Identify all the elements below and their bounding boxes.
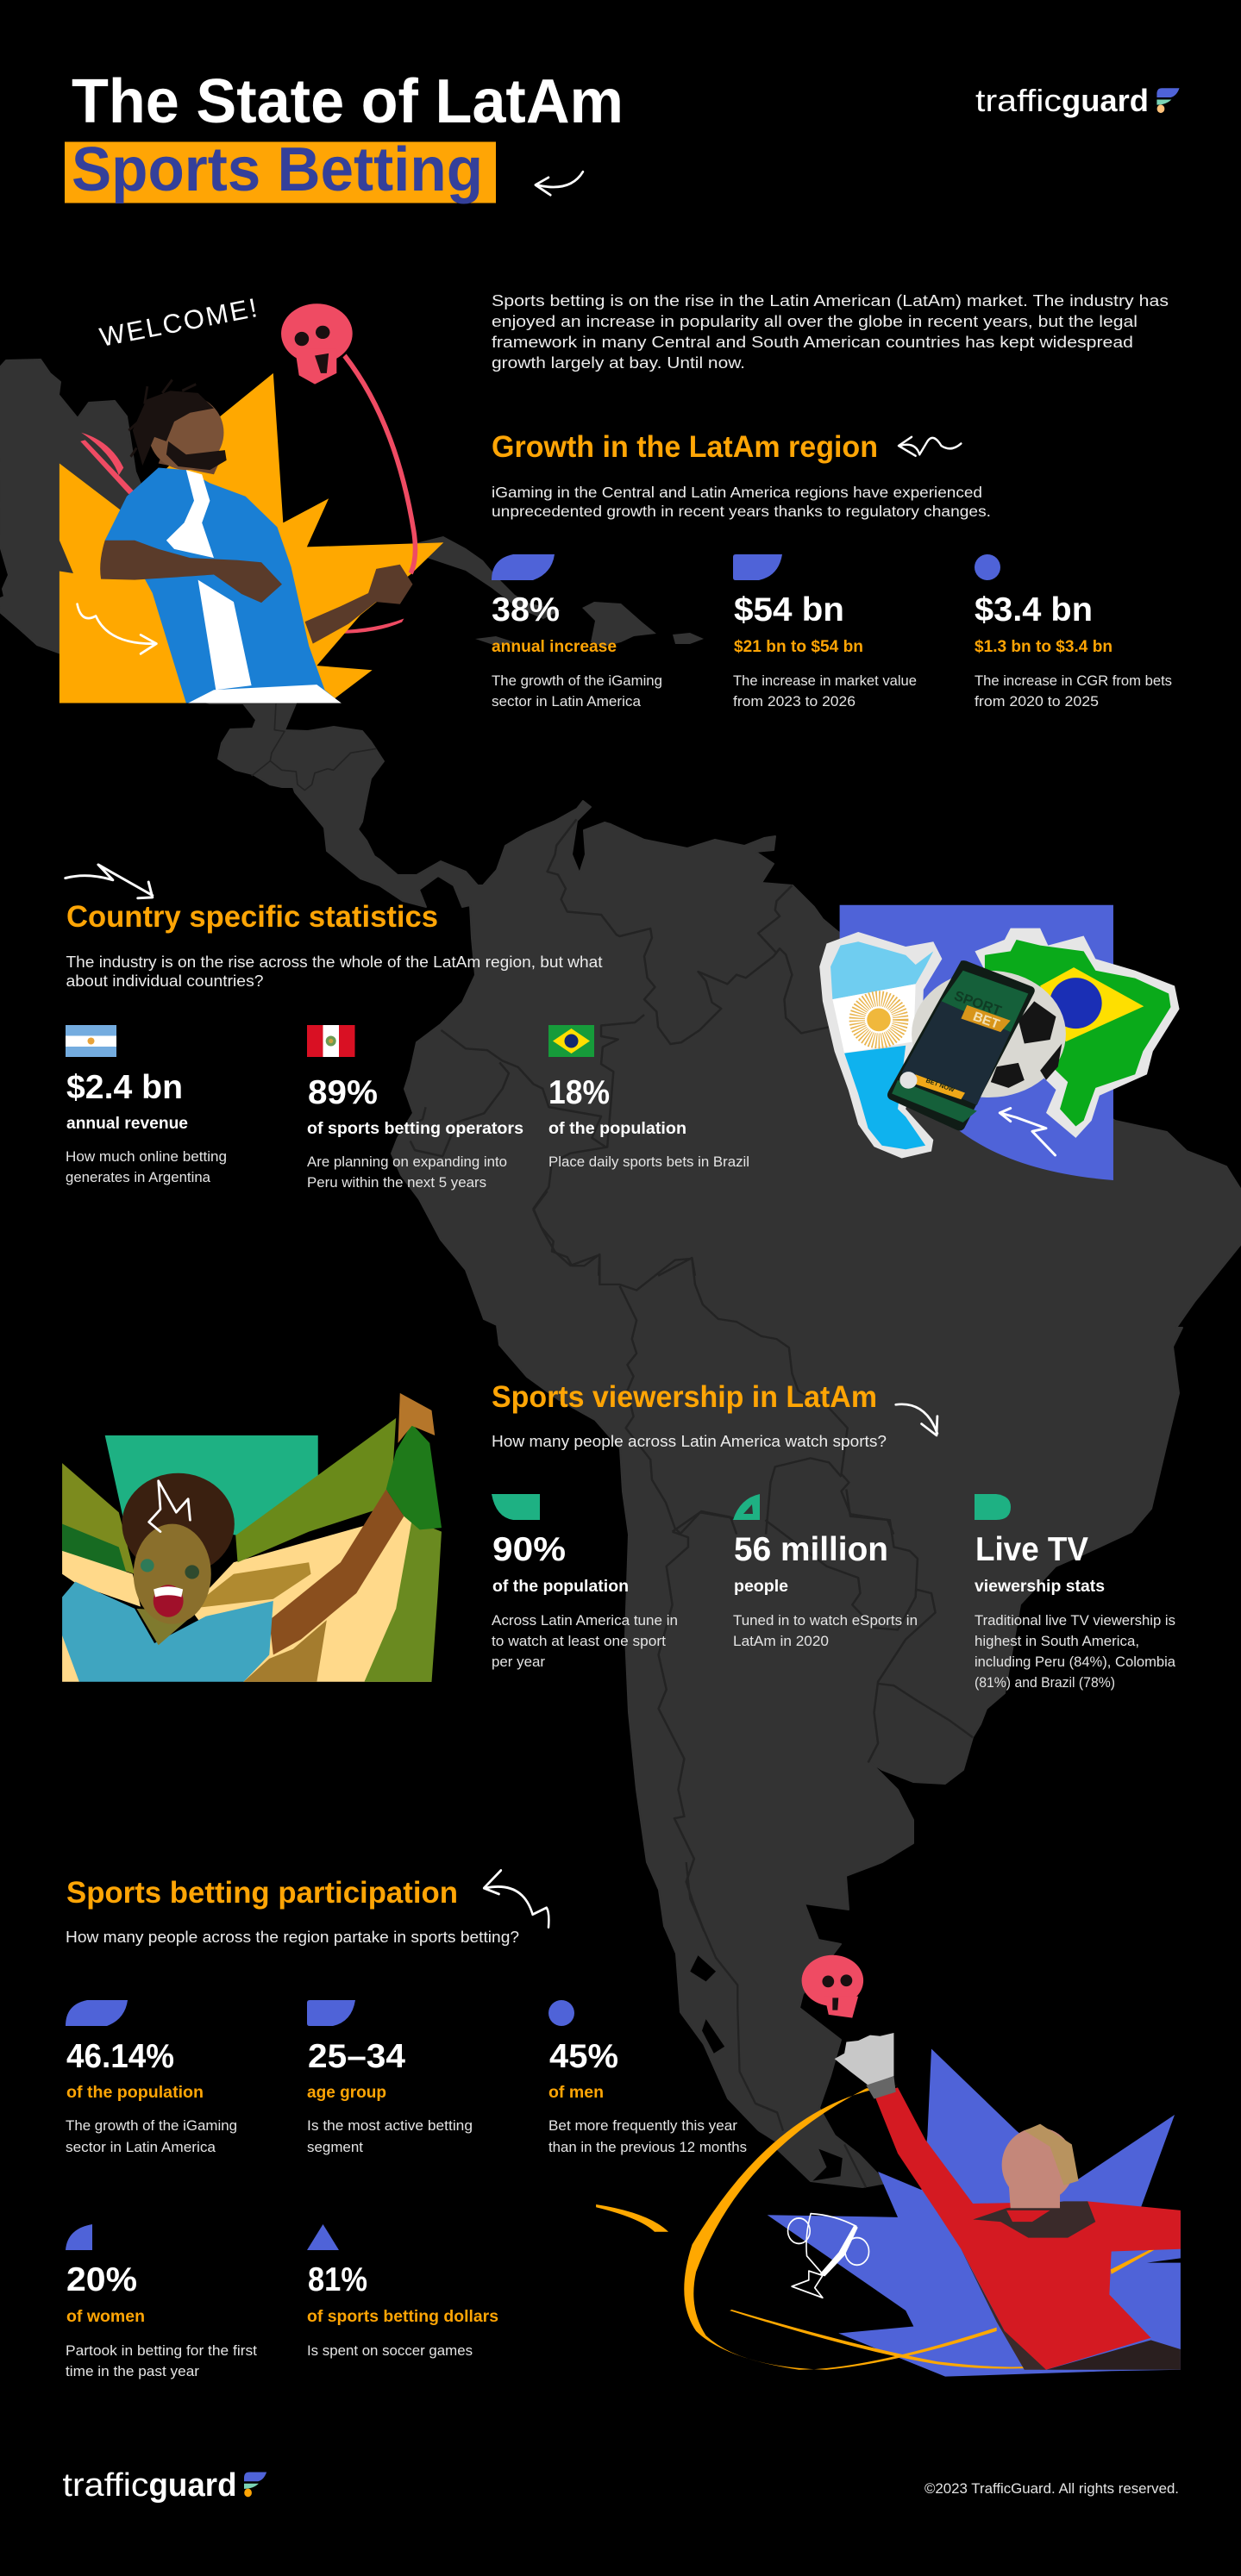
stat: Live TV: (81%) and Brazil (78%): [975, 1675, 1115, 1691]
stat: 38%: [492, 554, 662, 710]
blue burst: [768, 2048, 1181, 2377]
stat: 56 million: LatAm in 2020: [733, 1634, 829, 1649]
stat: Argentina: How much online betting: [66, 1149, 227, 1165]
stat: $3.4 bn: $1.3 bn to $3.4 bn: [975, 638, 1113, 656]
stat: 90%: [492, 1494, 678, 1670]
stat: Live TV: [975, 1494, 1176, 1691]
stat: 45%: of men: [548, 2084, 604, 2102]
pink arc: [345, 355, 416, 573]
stat: 20%: [66, 2224, 257, 2379]
intro paragraph: Sports betting is on the rise in the Latin American (LatAm) market. The industry has: [492, 291, 1169, 309]
title highlight: Sports Betting: Sports Betting: [72, 135, 483, 204]
intro paragraph: enjoyed an increase in popularity all over the globe in recent years, but the legal: [492, 312, 1138, 330]
orange swoosh: [596, 2085, 1154, 2370]
stat: $54 bn: The increase in market value: [733, 673, 917, 689]
intro text: How many people across Latin America watch sports?: [492, 1433, 887, 1450]
stat: Peru: 89%: [308, 1074, 378, 1111]
stat: $3.4 bn: from 2020 to 2025: [975, 694, 1099, 710]
stat: $54 bn: [733, 554, 917, 710]
stat: Peru: Peru within the next 5 years: [307, 1175, 486, 1191]
stat: Brazil: of the population: [548, 1120, 686, 1138]
panel: growth in the LatAm region: [492, 430, 1172, 710]
icon: trophy: [788, 2214, 869, 2298]
stat: Argentina: [66, 1025, 227, 1185]
stat: 56 million: 56 million: [734, 1531, 888, 1568]
panel: sports betting participation: [66, 1871, 747, 2379]
stat: 20%: of women: [66, 2308, 145, 2326]
WELCOME! handwritten label: WELCOME!: [97, 292, 260, 353]
heading: Sports betting participation: [66, 1876, 458, 1910]
stat: 46.14%: 46.14%: [66, 2038, 174, 2075]
footer logo: trafficguard: trafficguard: [62, 2467, 236, 2504]
stat: Argentina: generates in Argentina: [66, 1170, 211, 1185]
stat: 81%: Is spent on soccer games: [307, 2343, 473, 2359]
crown doodle: [149, 1481, 190, 1532]
stat: 56 million: Tuned in to watch eSports in: [733, 1613, 918, 1629]
stat: Argentina: $2.4 bn: [66, 1069, 183, 1106]
arrow: hooked: [484, 1871, 548, 1928]
intro text: unprecedented growth in recent years thanks to regulatory changes.: [492, 503, 991, 520]
blue backdrop: [840, 905, 1113, 1180]
panel: sports viewership in LatAm: [492, 1380, 1176, 1691]
background map of Latin America: [0, 360, 1241, 2188]
stat: 25-34: 25–34: [308, 2038, 405, 2075]
stat: Live TV: Traditional live TV viewership is: [975, 1613, 1175, 1629]
stat: Argentina: annual revenue: [66, 1115, 188, 1133]
betting phone: SPORT: [952, 988, 1004, 1019]
betting phone: [887, 960, 1035, 1131]
stat: Brazil: 18%: [548, 1074, 610, 1111]
stat: 90%: 90%: [492, 1531, 566, 1568]
betting phone: BET NOW: [924, 1077, 956, 1094]
logo: trafficguard top: traffic guard: [975, 83, 1149, 118]
title block: [65, 67, 624, 204]
stat: 46.14%: sector in Latin America: [66, 2140, 216, 2155]
flag: [62, 1393, 442, 1682]
intro text: [492, 484, 991, 520]
stat: Live TV: viewership stats: [975, 1578, 1105, 1596]
stat: 90%: of the population: [492, 1578, 629, 1596]
stat: 45%: [548, 2000, 747, 2155]
stat: 90%: Across Latin America tune in: [492, 1613, 678, 1629]
stat: Peru: Are planning on expanding into: [307, 1154, 507, 1170]
icon: Peru flag: [307, 1025, 355, 1057]
copyright: ©2023 TrafficGuard. All rights reserved.: [924, 2481, 1179, 2497]
stat: $3.4 bn: The increase in CGR from bets: [975, 673, 1172, 689]
stat: 56 million: [733, 1494, 918, 1649]
stat: 45%: Bet more frequently this year: [548, 2118, 738, 2134]
arrow: curved: [896, 1404, 937, 1435]
intro text: about individual countries?: [66, 972, 264, 990]
stat: 25-34: segment: [307, 2140, 363, 2155]
intro paragraph: [492, 291, 1169, 372]
illustration: footballer on orange burst: [60, 303, 443, 703]
stat: 38%: 38%: [492, 591, 560, 628]
stat: $3.4 bn: $3.4 bn: [975, 591, 1093, 628]
stat: $54 bn: from 2023 to 2026: [733, 694, 856, 710]
illustration: Argentina and Brazil stickers with phone and football: [819, 905, 1180, 1180]
stat: 45%: 45%: [549, 2038, 618, 2075]
stat: 81%: of sports betting dollars: [307, 2308, 498, 2326]
intro text: [66, 953, 602, 990]
stat: Live TV: highest in South America,: [975, 1634, 1139, 1649]
stat: 20%: Partook in betting for the first: [66, 2343, 257, 2359]
footballer: [100, 380, 412, 703]
stat: 46.14%: [66, 2000, 237, 2155]
stat: 38%: sector in Latin America: [492, 694, 642, 710]
arrow: zigzag: [66, 865, 153, 898]
fan: [62, 1473, 404, 1682]
intro text: The industry is on the rise across the whole of the LatAm region, but what: [66, 953, 602, 971]
stat: 25-34: [307, 2000, 473, 2155]
goalkeeper: [835, 2033, 1181, 2370]
stat: $54 bn: $21 bn to $54 bn: [734, 638, 863, 656]
stat: Live TV: Live TV: [975, 1531, 1088, 1568]
stat: 81%: [307, 2224, 498, 2359]
stat: 20%: time in the past year: [66, 2364, 200, 2379]
orange burst: [60, 373, 443, 703]
Argentina sticker: [819, 932, 942, 1159]
arrow: white zigzag: [1000, 1109, 1056, 1155]
stat: 38%: The growth of the iGaming: [492, 673, 662, 689]
stat: 38%: annual increase: [492, 638, 617, 656]
heading: Growth in the LatAm region: [492, 430, 878, 464]
stat: Live TV: including Peru (84%), Colombia: [975, 1654, 1176, 1670]
panel: country specific statistics: [66, 865, 749, 1191]
arrow: title doodle: [536, 172, 583, 195]
intro text: iGaming in the Central and Latin America regions have experienced: [492, 484, 982, 501]
stat: 46.14%: The growth of the iGaming: [66, 2118, 237, 2134]
stat: $54 bn: $54 bn: [734, 591, 844, 628]
icon: Argentina flag: [66, 1025, 116, 1057]
stat: 56 million: people: [734, 1578, 788, 1596]
heading: Sports viewership in LatAm: [492, 1380, 877, 1414]
stat: 45%: than in the previous 12 months: [548, 2140, 747, 2155]
icon: red skull: [281, 303, 353, 385]
stat: 20%: 20%: [66, 2261, 137, 2298]
intro paragraph: framework in many Central and South American countries has kept widespread: [492, 333, 1133, 351]
stat: Brazil: Place daily sports bets in Brazil: [548, 1154, 749, 1170]
stat: 90%: per year: [492, 1654, 546, 1670]
green backdrop: [105, 1435, 318, 1535]
arrow: squiggle: [899, 437, 961, 456]
intro paragraph: growth largely at bay. Until now.: [492, 353, 745, 372]
football: [912, 971, 1066, 1097]
betting phone: BET: [971, 1010, 1002, 1032]
stat: Peru: of sports betting operators: [307, 1120, 523, 1138]
icon: Brazil flag: [548, 1025, 594, 1057]
illustration: goalkeeper with trophy: [596, 1955, 1181, 2377]
intro text: How many people across the region partake in sports betting?: [66, 1929, 519, 1946]
stat: 90%: to watch at least one sport: [492, 1634, 666, 1649]
stat: 46.14%: of the population: [66, 2084, 204, 2102]
stat: 25-34: Is the most active betting: [307, 2118, 473, 2134]
title line: The State of LatAm: The State of LatAm: [72, 67, 624, 136]
icon: red skull: [802, 1955, 863, 2018]
pink scribbles: [80, 433, 404, 634]
heading: Country specific statistics: [66, 900, 438, 934]
stat: $3.4 bn: [975, 554, 1172, 710]
stat: Peru: [307, 1025, 523, 1191]
arrow: white doodle: [78, 604, 156, 653]
illustration: cheering fan with Brazil flag: [62, 1393, 442, 1682]
stat: Brazil: [548, 1025, 749, 1170]
stat: 25-34: age group: [307, 2084, 386, 2102]
Brazil sticker: [975, 928, 1180, 1138]
stat: 81%: 81%: [308, 2261, 367, 2298]
